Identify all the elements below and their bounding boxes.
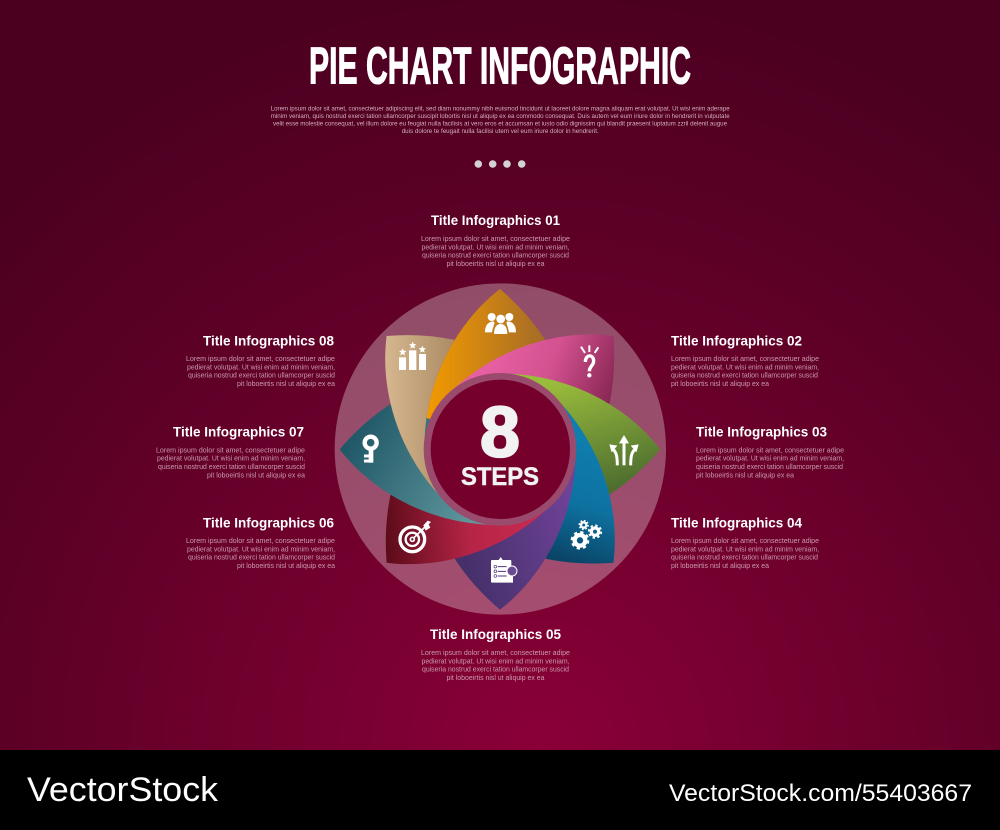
intro text block: velit esse molestie consequat, vel illum dolore eu feugiat nulla facilisis at vero eros et accumsan et iusto odio dignissim qui blandit praesent luptatum zzril delenit augue bbox=[273, 120, 727, 127]
label 07: pedierat volutpat. Ut wisi enim ad minim veniam, bbox=[157, 454, 305, 463]
petal 07 teal bbox=[340, 404, 500, 525]
label 02: pit loboeirtis nisl ut aliquip ex ea bbox=[671, 379, 770, 388]
label 08: pedierat volutpat. Ut wisi enim ad minim veniam, bbox=[187, 362, 335, 371]
label 07: Title Infographics 07 bbox=[173, 424, 304, 439]
petal 06 maroon bbox=[355, 418, 554, 616]
label 02: Lorem ipsum dolor sit amet, consectetuer adipe bbox=[671, 354, 819, 363]
footer url: VectorStock.com/55403667 bbox=[669, 780, 972, 807]
label 01 bbox=[421, 213, 570, 268]
title: PIE CHART INFOGRAPHIC bbox=[309, 36, 691, 94]
label 05: quiseria nostrud exerci tation ullamcorper suscid bbox=[422, 665, 569, 674]
pie chart flower bbox=[333, 282, 667, 616]
icon: diverging arrows bbox=[609, 435, 639, 465]
center number: 8 bbox=[480, 393, 520, 473]
label 05: Title Infographics 05 bbox=[430, 627, 561, 642]
icon: clipboard checklist bbox=[491, 557, 517, 583]
label 08: pit loboeirtis nisl ut aliquip ex ea bbox=[237, 379, 336, 388]
label 06: quiseria nostrud exerci tation ullamcorper suscid bbox=[188, 553, 335, 562]
label 04: pedierat volutpat. Ut wisi enim ad minim veniam, bbox=[671, 544, 819, 553]
footer logo: VectorStock bbox=[27, 771, 219, 809]
intro text block bbox=[271, 105, 730, 135]
label 04: quiseria nostrud exerci tation ullamcorper suscid bbox=[671, 553, 818, 562]
label 08: Lorem ipsum dolor sit amet, consectetuer adipe bbox=[186, 354, 335, 363]
label 07: pit loboeirtis nisl ut aliquip ex ea bbox=[207, 470, 306, 479]
icon: podium with stars bbox=[399, 342, 426, 370]
label 06 bbox=[186, 515, 336, 570]
label 08: Title Infographics 08 bbox=[203, 333, 334, 348]
label 05: Lorem ipsum dolor sit amet, consectetuer adipe bbox=[421, 648, 570, 657]
label 02: Title Infographics 02 bbox=[671, 333, 802, 348]
label 04: Lorem ipsum dolor sit amet, consectetuer adipe bbox=[671, 536, 819, 545]
icon: key bbox=[364, 437, 377, 463]
petal 02 pink bbox=[446, 282, 645, 481]
footer bar bbox=[0, 750, 1000, 830]
label 06: Lorem ipsum dolor sit amet, consectetuer adipe bbox=[186, 536, 335, 545]
label 03: Title Infographics 03 bbox=[696, 424, 827, 439]
label 01: Lorem ipsum dolor sit amet, consectetuer adipe bbox=[421, 234, 570, 243]
label 02: quiseria nostrud exerci tation ullamcorper suscid bbox=[671, 371, 818, 380]
icon: target bbox=[400, 521, 431, 552]
label 03 bbox=[696, 424, 844, 479]
label 08 bbox=[186, 333, 336, 388]
intro text block: Lorem ipsum dolor sit amet, consectetuer adipiscing elit, sed diam nonummy nibh euismod tincidunt ut laoreet dolore magna aliquam erat volutpat. Ut wisi enim aderape bbox=[271, 105, 730, 112]
center ring bbox=[424, 373, 576, 526]
label 03: pedierat volutpat. Ut wisi enim ad minim veniam, bbox=[696, 454, 844, 463]
label 06: pit loboeirtis nisl ut aliquip ex ea bbox=[237, 561, 336, 570]
label 03: pit loboeirtis nisl ut aliquip ex ea bbox=[696, 470, 795, 479]
center disc bbox=[431, 380, 570, 519]
label 02 bbox=[671, 333, 819, 388]
label 04: Title Infographics 04 bbox=[671, 515, 802, 530]
center label: STEPS bbox=[461, 463, 539, 491]
petal 03 green bbox=[500, 374, 660, 494]
petal 01 orange bbox=[424, 289, 545, 449]
label 01: pedierat volutpat. Ut wisi enim ad minim veniam, bbox=[422, 242, 570, 251]
label 01: pit loboeirtis nisl ut aliquip ex ea bbox=[446, 259, 545, 268]
label 02: pedierat volutpat. Ut wisi enim ad minim veniam, bbox=[671, 362, 819, 371]
label 05 bbox=[421, 627, 570, 682]
intro text block: duis dolore te feugait nulla facilisi utem vel eum iriure dolor in hendrerit. bbox=[402, 128, 599, 135]
intro text block: minim veniam, quis nostrud exerci tation ullamcorper suscipit lobortis nisl ut aliquip ex ea commodo consequat. Duis autem vel eum iriure dolor in hendrerit in vulputate bbox=[271, 113, 730, 120]
label 07: quiseria nostrud exerci tation ullamcorper suscid bbox=[158, 462, 305, 471]
petal 04 blue bbox=[468, 396, 667, 595]
label 03: quiseria nostrud exerci tation ullamcorper suscid bbox=[696, 462, 843, 471]
icon: gears bbox=[572, 521, 601, 548]
petal 05 purple bbox=[455, 449, 576, 610]
label 07 bbox=[156, 424, 306, 479]
label 05: pit loboeirtis nisl ut aliquip ex ea bbox=[446, 673, 545, 682]
icon: question mark bbox=[581, 345, 598, 377]
petal 08 tan bbox=[385, 335, 454, 496]
label 04: pit loboeirtis nisl ut aliquip ex ea bbox=[671, 561, 770, 570]
outer translucent disc bbox=[335, 283, 666, 615]
label 06: Title Infographics 06 bbox=[203, 515, 334, 530]
label 01: Title Infographics 01 bbox=[431, 213, 560, 228]
label 01: quiseria nostrud exerci tation ullamcorper suscid bbox=[422, 251, 569, 260]
label 05: pedierat volutpat. Ut wisi enim ad minim veniam, bbox=[422, 656, 570, 665]
pagination dots bbox=[474, 160, 526, 168]
label 07: Lorem ipsum dolor sit amet, consectetuer adipe bbox=[156, 445, 305, 454]
label 06: pedierat volutpat. Ut wisi enim ad minim veniam, bbox=[187, 544, 335, 553]
icon: people bbox=[485, 313, 516, 334]
label 03: Lorem ipsum dolor sit amet, consectetuer adipe bbox=[696, 445, 844, 454]
label 08: quiseria nostrud exerci tation ullamcorper suscid bbox=[188, 371, 335, 380]
label 04 bbox=[671, 515, 819, 570]
